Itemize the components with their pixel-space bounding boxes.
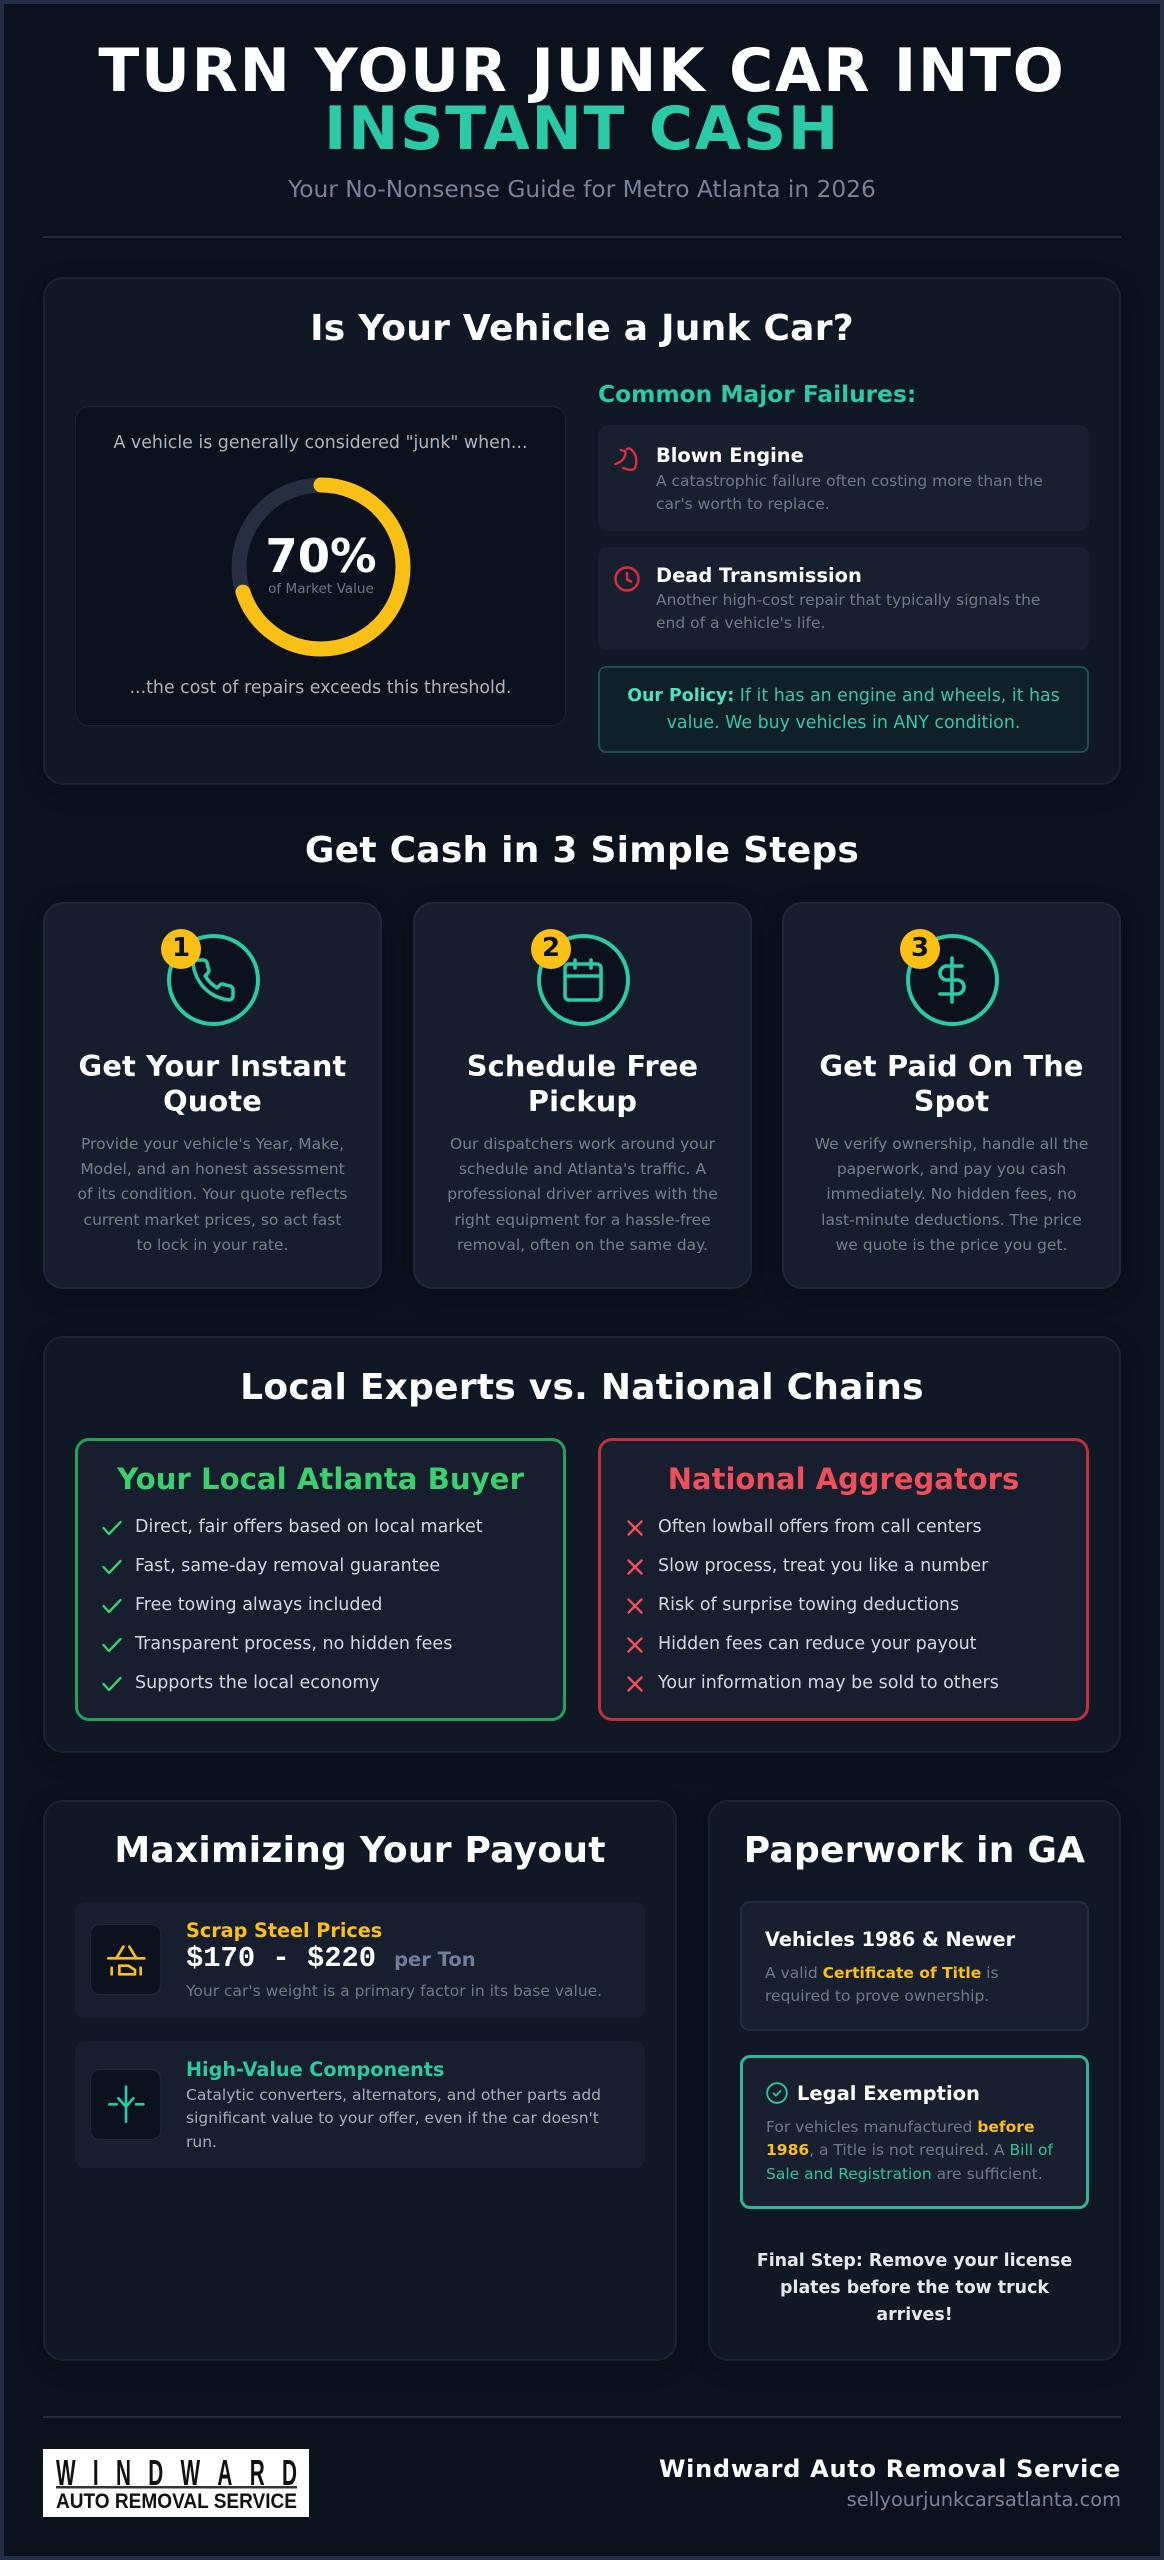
failure description: A catastrophic failure often costing more than the xyxy=(656,472,1043,490)
heading: common major failures: Common Major Failures: xyxy=(598,381,916,408)
step description xyxy=(77,1135,348,1254)
description: significant value to your offer, even if the car doesn't xyxy=(186,2109,599,2127)
gauge value: 70% xyxy=(265,529,377,583)
card text xyxy=(766,2118,1054,2183)
logo: windward auto removal service xyxy=(43,2449,309,2517)
card text: 1986, a Title is not required. A Bill of xyxy=(766,2141,1053,2159)
title: TURN YOUR JUNK CAR INTO xyxy=(98,36,1066,106)
panel: local buyer xyxy=(75,1438,566,1721)
icon: phone xyxy=(166,934,260,1026)
price: $170 - $220 per Ton xyxy=(186,1942,476,1975)
subtitle: Your No-Nonsense Guide for Metro Atlanta in 2026 xyxy=(288,176,876,203)
item: scrap steel prices xyxy=(75,1902,645,2018)
text: final step: arrives! xyxy=(876,2305,953,2325)
drawback list: Your information may be sold to others xyxy=(658,1673,999,1693)
badge: 2 xyxy=(531,929,571,969)
callout: our policy: Our Policy: If it has an engine and wheels, it has xyxy=(627,686,1060,706)
gauge caption: of Market Value xyxy=(268,581,374,597)
failure description: Another high-cost repair that typically signals the xyxy=(656,591,1040,609)
heading: Paperwork in GA xyxy=(744,1830,1085,1871)
drawback list xyxy=(627,1517,999,1693)
title xyxy=(98,36,1066,164)
step description: last-minute deductions. The price xyxy=(821,1211,1082,1229)
panel: maximizing your payout xyxy=(43,1800,677,2361)
panel: 70 percent threshold card xyxy=(75,406,566,726)
card: legal exemption xyxy=(740,2055,1089,2209)
benefit list xyxy=(102,1517,483,1693)
step description: current market prices, so act fast xyxy=(84,1211,341,1229)
icon: engine squiggle xyxy=(614,447,638,471)
step description: removal, often on the same day. xyxy=(457,1236,708,1254)
panel: local experts vs national chains xyxy=(43,1336,1121,1753)
icon: calendar xyxy=(536,934,630,1026)
column heading: National Aggregators xyxy=(668,1462,1019,1496)
failure title: Blown Engine xyxy=(656,444,804,467)
panel: paperwork in GA xyxy=(708,1800,1121,2361)
step description: of its condition. Your quote reflects xyxy=(77,1185,348,1203)
failure description: end of a vehicle's life. xyxy=(656,614,825,632)
step title: Spot xyxy=(914,1084,989,1118)
heading: Local Experts vs. National Chains xyxy=(240,1367,924,1408)
step title xyxy=(819,1049,1084,1118)
card text xyxy=(765,1964,999,2005)
panel: step 1 xyxy=(43,902,382,1289)
card title: Legal Exemption xyxy=(797,2082,980,2105)
step title xyxy=(467,1049,698,1118)
benefit list: Fast, same-day removal guarantee xyxy=(135,1556,440,1576)
step title: Pickup xyxy=(528,1084,637,1118)
drawback list: Hidden fees can reduce your payout xyxy=(658,1634,977,1654)
callout: our policy xyxy=(598,666,1089,753)
icon: clock xyxy=(614,566,640,592)
panel: is your vehicle a junk car xyxy=(43,277,1121,785)
drawback list: Slow process, treat you like a number xyxy=(658,1556,988,1576)
card text: A valid Certificate of Title is xyxy=(765,1964,999,1982)
card title: Vehicles 1986 & Newer xyxy=(765,1928,1015,1951)
text: outro: ...the cost of repairs exceeds this threshold. xyxy=(130,678,511,698)
footer: company name: Windward Auto Removal Service xyxy=(659,2455,1121,2483)
description xyxy=(186,2086,601,2151)
step description: We verify ownership, handle all the xyxy=(815,1135,1088,1153)
benefit list: Transparent process, no hidden fees xyxy=(135,1634,452,1654)
callout: our policy: value. We buy vehicles in ANY condition. xyxy=(667,713,1020,733)
failure description xyxy=(656,591,1040,632)
step description: to lock in your rate. xyxy=(137,1236,288,1254)
badge: 3 xyxy=(900,929,940,969)
badge: 2: 2 xyxy=(542,933,560,963)
text: final step: Final Step: Remove your license xyxy=(757,2251,1072,2271)
panel: step 2 xyxy=(413,902,752,1289)
heading: Maximizing Your Payout xyxy=(114,1830,606,1871)
icon: check circle xyxy=(766,2082,788,2104)
badge: 1 xyxy=(161,929,201,969)
step description: immediately. No hidden fees, no xyxy=(826,1185,1077,1203)
panel: step 3 xyxy=(782,902,1121,1289)
description: Catalytic converters, alternators, and other parts add xyxy=(186,2086,601,2104)
icon: dollar xyxy=(906,934,998,1026)
failure title: Dead Transmission xyxy=(656,564,862,587)
chart: 70 percent gauge xyxy=(232,478,410,656)
heading: Is Your Vehicle a Junk Car? xyxy=(310,308,854,349)
drawback list: Often lowball offers from call centers xyxy=(658,1517,982,1537)
column heading: Your Local Atlanta Buyer xyxy=(117,1462,524,1496)
step title: Get Your Instant xyxy=(79,1049,346,1083)
failure description xyxy=(656,472,1043,513)
step title: Schedule Free xyxy=(467,1049,698,1083)
footer: website: sellyourjunkcarsatlanta.com xyxy=(847,2488,1121,2511)
step description: right equipment for a hassle-free xyxy=(454,1211,711,1229)
item: high-value components xyxy=(75,2041,645,2168)
benefit list: Supports the local economy xyxy=(135,1673,380,1693)
text: final step xyxy=(757,2251,1072,2325)
step description xyxy=(447,1135,718,1254)
card text: required to prove ownership. xyxy=(765,1987,989,2005)
card text: Sale and Registration are sufficient. xyxy=(766,2165,1043,2183)
label: High-Value Components xyxy=(186,2058,444,2081)
step title: Quote xyxy=(163,1084,262,1118)
step description xyxy=(815,1135,1088,1254)
step title xyxy=(79,1049,346,1118)
card: vehicles 1986 and newer xyxy=(740,1901,1089,2031)
step description: we quote is the price you get. xyxy=(836,1236,1067,1254)
step description: paperwork, and pay you cash xyxy=(837,1160,1066,1178)
step description: Provide your vehicle's Year, Make, xyxy=(81,1135,344,1153)
step description: schedule and Atlanta's traffic. A xyxy=(459,1160,706,1178)
icon: scrap steel xyxy=(90,1924,161,1995)
step description: Our dispatchers work around your xyxy=(450,1135,715,1153)
failure: blown engine xyxy=(598,425,1089,531)
step description: Model, and an honest assessment xyxy=(80,1160,345,1178)
description: Your car's weight is a primary factor in its base value. xyxy=(186,1982,602,2000)
failure: dead transmission xyxy=(598,547,1089,650)
badge: 3: 3 xyxy=(911,933,929,963)
panel: national aggregators xyxy=(598,1438,1089,1721)
label: Scrap Steel Prices xyxy=(186,1919,382,1942)
step title: Get Paid On The xyxy=(819,1049,1084,1083)
text: intro: A vehicle is generally considered "junk" when... xyxy=(114,433,527,453)
badge: 1: 1 xyxy=(172,933,190,963)
benefit list: Free towing always included xyxy=(135,1595,382,1615)
description: run. xyxy=(186,2133,217,2151)
step description: professional driver arrives with the xyxy=(447,1185,718,1203)
heading: steps: Get Cash in 3 Simple Steps xyxy=(305,830,859,871)
failure description: car's worth to replace. xyxy=(656,495,830,513)
title: INSTANT CASH xyxy=(324,94,840,164)
icon: components xyxy=(90,2069,161,2140)
drawback list: Risk of surprise towing deductions xyxy=(658,1595,959,1615)
benefit list: Direct, fair offers based on local market xyxy=(135,1517,483,1537)
text: final step: plates before the tow truck xyxy=(780,2278,1049,2298)
card text: For vehicles manufactured before xyxy=(766,2118,1034,2136)
